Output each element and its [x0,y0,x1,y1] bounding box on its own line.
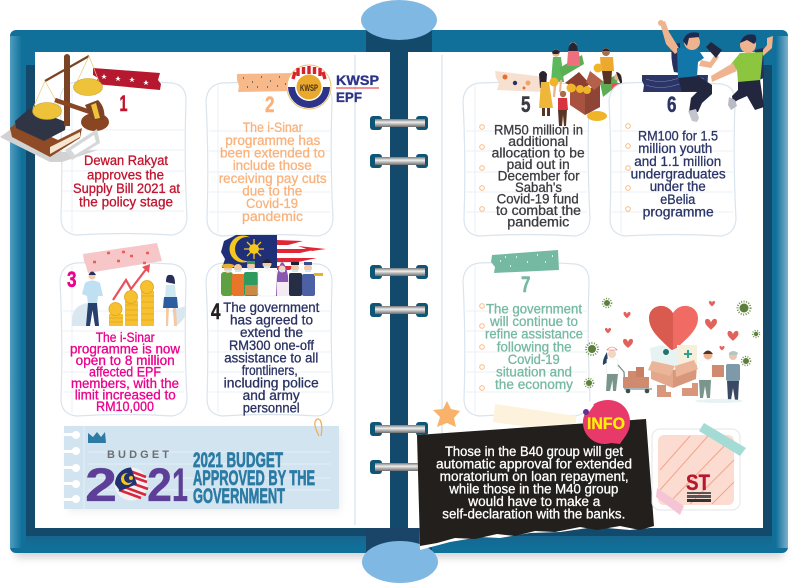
number 6: 6 [667,92,676,117]
number 1: 1 [120,91,128,116]
text: info [436,444,632,522]
text: note 5: allocation to be [492,146,585,160]
tape: pink [656,488,684,515]
panel: note 3 [60,243,187,416]
heading: budget approved: APPROVED BY THE [193,467,315,490]
panel: budget note [64,419,340,511]
text: note 2: pandemic [242,209,303,224]
heading: budget approved: 2021 BUDGET [193,449,283,472]
number 2: 2 [265,92,274,117]
person: red top [612,72,623,123]
text: note 7: situation and [496,364,572,380]
text: note 2: receiving pay cuts [219,171,327,186]
text: note 2: include those [233,158,312,173]
panel: note 6 [609,20,773,236]
panel: info box [417,418,660,550]
icon: crown [88,432,106,443]
icon: scales, gavel and books [0,54,109,162]
person: orange shirt [594,48,614,84]
tape: green dots [491,250,559,273]
text: note 2 [219,120,327,224]
torn edge white [417,418,660,550]
number 7: 7 [521,272,530,297]
text: note 1: Dewan Rakyat [84,153,168,168]
info background [417,419,654,546]
text: note 7: following the [497,339,572,354]
text: note 4: frontliners, [242,363,298,378]
panel: note 2 [206,65,379,236]
tape: cream spots [495,71,545,92]
number 3: 3 [67,267,76,292]
text: info: moratorium on loan repayment, [440,469,629,484]
text: note 6: eBelia [660,192,696,207]
banknotes [559,55,584,77]
text: note 3: RM10,000 [96,399,154,414]
nurse with cart [603,347,652,393]
kid: red top [550,78,576,126]
badge: INFO [583,400,630,444]
big heart [649,306,698,352]
text: note 3 [70,330,180,414]
two volunteers [699,350,740,400]
student in blue [658,20,722,122]
icon: people with money and box [539,42,623,126]
tape: pink hearts [83,243,162,273]
top binder tab [361,0,437,40]
text: note 6: programme [643,204,714,220]
heading: budget approved: GOVERNMENT [193,485,285,508]
viruses [584,298,760,388]
text: note 4: extend the [240,325,303,340]
panel: note 7 [463,250,590,416]
tape: teal [699,423,746,456]
text: note 4: including police [224,376,319,390]
text: note 6: and 1.1 million [634,154,721,169]
text: note 6 [631,128,726,220]
logo: ST: ST [686,470,710,495]
text: note 5: paid out in [507,157,570,172]
icon: KWSP EPF logo: KWSP [336,72,379,88]
number 4: 4 [211,299,221,324]
left notebook page [35,52,390,528]
logo: 2021 with flag: 2 [85,458,117,511]
text: note 3: The i-Sinar [96,330,155,345]
text: note 5: additional [508,134,568,149]
text: note 2: The i-Sinar [243,120,303,135]
text: note 4: RM300 one-off [229,338,314,353]
text: note 4: personnel [243,400,300,416]
text: info: while those in the M40 group [448,482,618,496]
person: pink top [567,42,580,66]
right notebook page [408,52,763,528]
text: note 2: due to the [242,184,302,198]
text: note 5: to combat the [496,203,581,218]
text: info: self-declaration with the banks. [442,506,625,522]
icon: KWSP EPF logo [287,65,379,109]
stacked boxes [657,383,698,397]
text: note 7: Covid-19 [508,352,560,367]
rings column [626,124,630,211]
text: note 6: under the [650,179,706,194]
text: note 6: RM100 for 1.5 [638,128,718,144]
text: note 4: The government [223,300,320,315]
heading: budget approved [193,449,315,508]
text: note 3: limit increased to [75,388,176,402]
medical supplies [650,345,697,366]
text: note 2: programme has [225,133,321,148]
text: note 7: will continue to [489,314,578,329]
text: note 1 [73,153,180,210]
text: note 5: RM50 million in [494,122,583,138]
coins [587,111,607,121]
text: note 5: Covid-19 fund [497,192,579,206]
text: note 1: Supply Bill 2021 at [73,181,180,196]
bottom binder tab [362,541,438,583]
illustration: aid box with heart and viruses [584,298,760,403]
text: note 3: programme is now [70,342,180,356]
text: note 2: Covid-19 [246,196,298,211]
person: yellow dress [539,71,553,116]
icon: KWSP EPF logo: EPF [336,89,362,105]
text: info: would have to make a [467,494,601,509]
text: info: automatic approval for extended [436,456,632,472]
text: note 5 [492,122,585,230]
text: note 5: December for [498,168,580,184]
text: note 7: the economy [495,377,573,392]
text: note 4: and army [243,388,300,403]
text: note 7 [485,302,583,392]
panel: Straits Times card [652,423,746,515]
student in green [711,34,773,110]
logo: 2021 with flag [85,458,188,511]
text: note 3: affected EPF [89,364,161,380]
text: note 4 [223,300,320,416]
label: BUDGET: BUDGET [107,449,169,461]
icon: paperclip [315,419,322,436]
number 5: 5 [521,92,530,117]
text: note 7: The government [486,302,582,316]
text: note 5: pandemic [507,214,570,230]
text: note 6: million youth [638,141,712,156]
logo: 2021 with flag: 1 [172,458,188,511]
text: note 3: open to 8 million [76,353,175,368]
text: note 6: undergraduates [631,166,726,182]
icon: KWSP EPF logo: KWSP [300,83,318,93]
icon: jumping students [658,20,773,122]
tape: peach dots [237,73,294,92]
person: green top [551,49,564,97]
rings column [480,125,484,211]
badge: INFO: INFO [587,414,625,433]
text: note 4: assistance to all [224,350,318,366]
logo: 2021 with flag: 2 [147,458,172,511]
text: note 7: refine assistance [485,327,583,342]
text: note 5: Sabah's [515,180,562,195]
panel: note 1 [0,54,187,235]
small hearts [605,301,738,350]
text: note 3: members, with the [71,376,179,391]
text: note 1: the policy stage [79,194,173,210]
text: note 2: been extended to [220,146,325,160]
aid box [648,360,698,388]
icon: orange star [433,401,460,427]
tape: navy waves [642,75,708,92]
binder rings [370,116,428,474]
panel: note 4 [206,235,333,416]
text: note 4: has agreed to [230,312,313,328]
icon: Malaysian flag and frontliners [221,235,326,296]
rings column [480,304,484,390]
text: note 1: approves the [87,168,164,182]
tape: cream [493,404,576,434]
spiral holes [64,431,80,503]
icon: coins and growth arrow with two people [72,264,186,326]
panel: note 5 [463,42,623,236]
tape: red stars [93,68,161,90]
text: info: Those in the B40 group will get [445,444,623,459]
